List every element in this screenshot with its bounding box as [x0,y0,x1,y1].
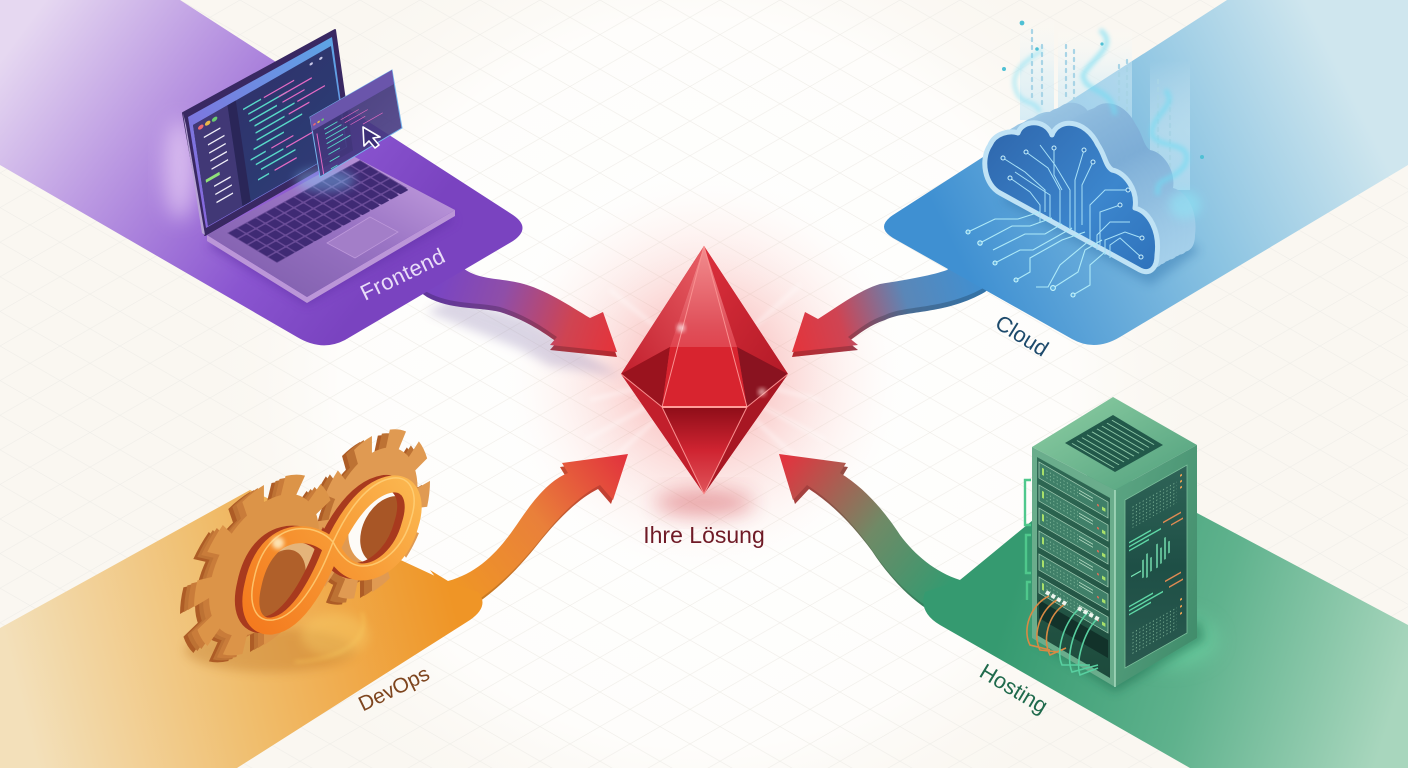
panel: hosting band [923,465,1408,768]
arrow: hosting to solution [779,454,982,624]
rack top [1032,397,1197,490]
data swirls [1002,21,1204,219]
label: Cloud: Cloud [991,310,1053,361]
icon: cursor [363,127,380,148]
icon: circuit cloud [966,15,1204,297]
circuit on platform [966,212,1105,297]
panel: frontend band [0,0,522,345]
platform shadow [1000,170,1200,285]
label: Hosting: Hosting [975,659,1052,718]
data columns [1020,15,1190,190]
rack right face [1115,445,1197,687]
laptop screen [183,30,352,235]
arrow: cloud to solution [792,255,1005,357]
circuit on cloud [1001,145,1144,259]
back gear [310,419,422,615]
icon: gears with infinity loop [185,419,429,677]
rack left face [1032,447,1115,687]
keyboard glow [295,168,355,192]
icon: server rack [1025,397,1216,692]
floor glow ring [295,612,364,662]
side handles [1025,480,1031,600]
infinity loop [243,478,414,626]
title: Ihre Lösung: Ihre Lösung [643,522,765,548]
label: DevOps: DevOps [355,662,433,716]
panel: devops band [0,490,482,768]
cloud body [985,103,1196,272]
panel: cloud band [884,0,1408,345]
laptop base [207,156,455,303]
label: Frontend: Frontend [356,243,449,305]
arrow: devops to solution [428,454,628,614]
network cables [1027,592,1100,675]
gear openings [231,469,429,639]
central red glow [499,170,909,580]
icon: red crystal [621,246,788,494]
icon: laptop [164,30,455,305]
arrow: frontend to solution [410,262,620,376]
front gear [190,460,324,677]
floating code panel [310,70,402,177]
